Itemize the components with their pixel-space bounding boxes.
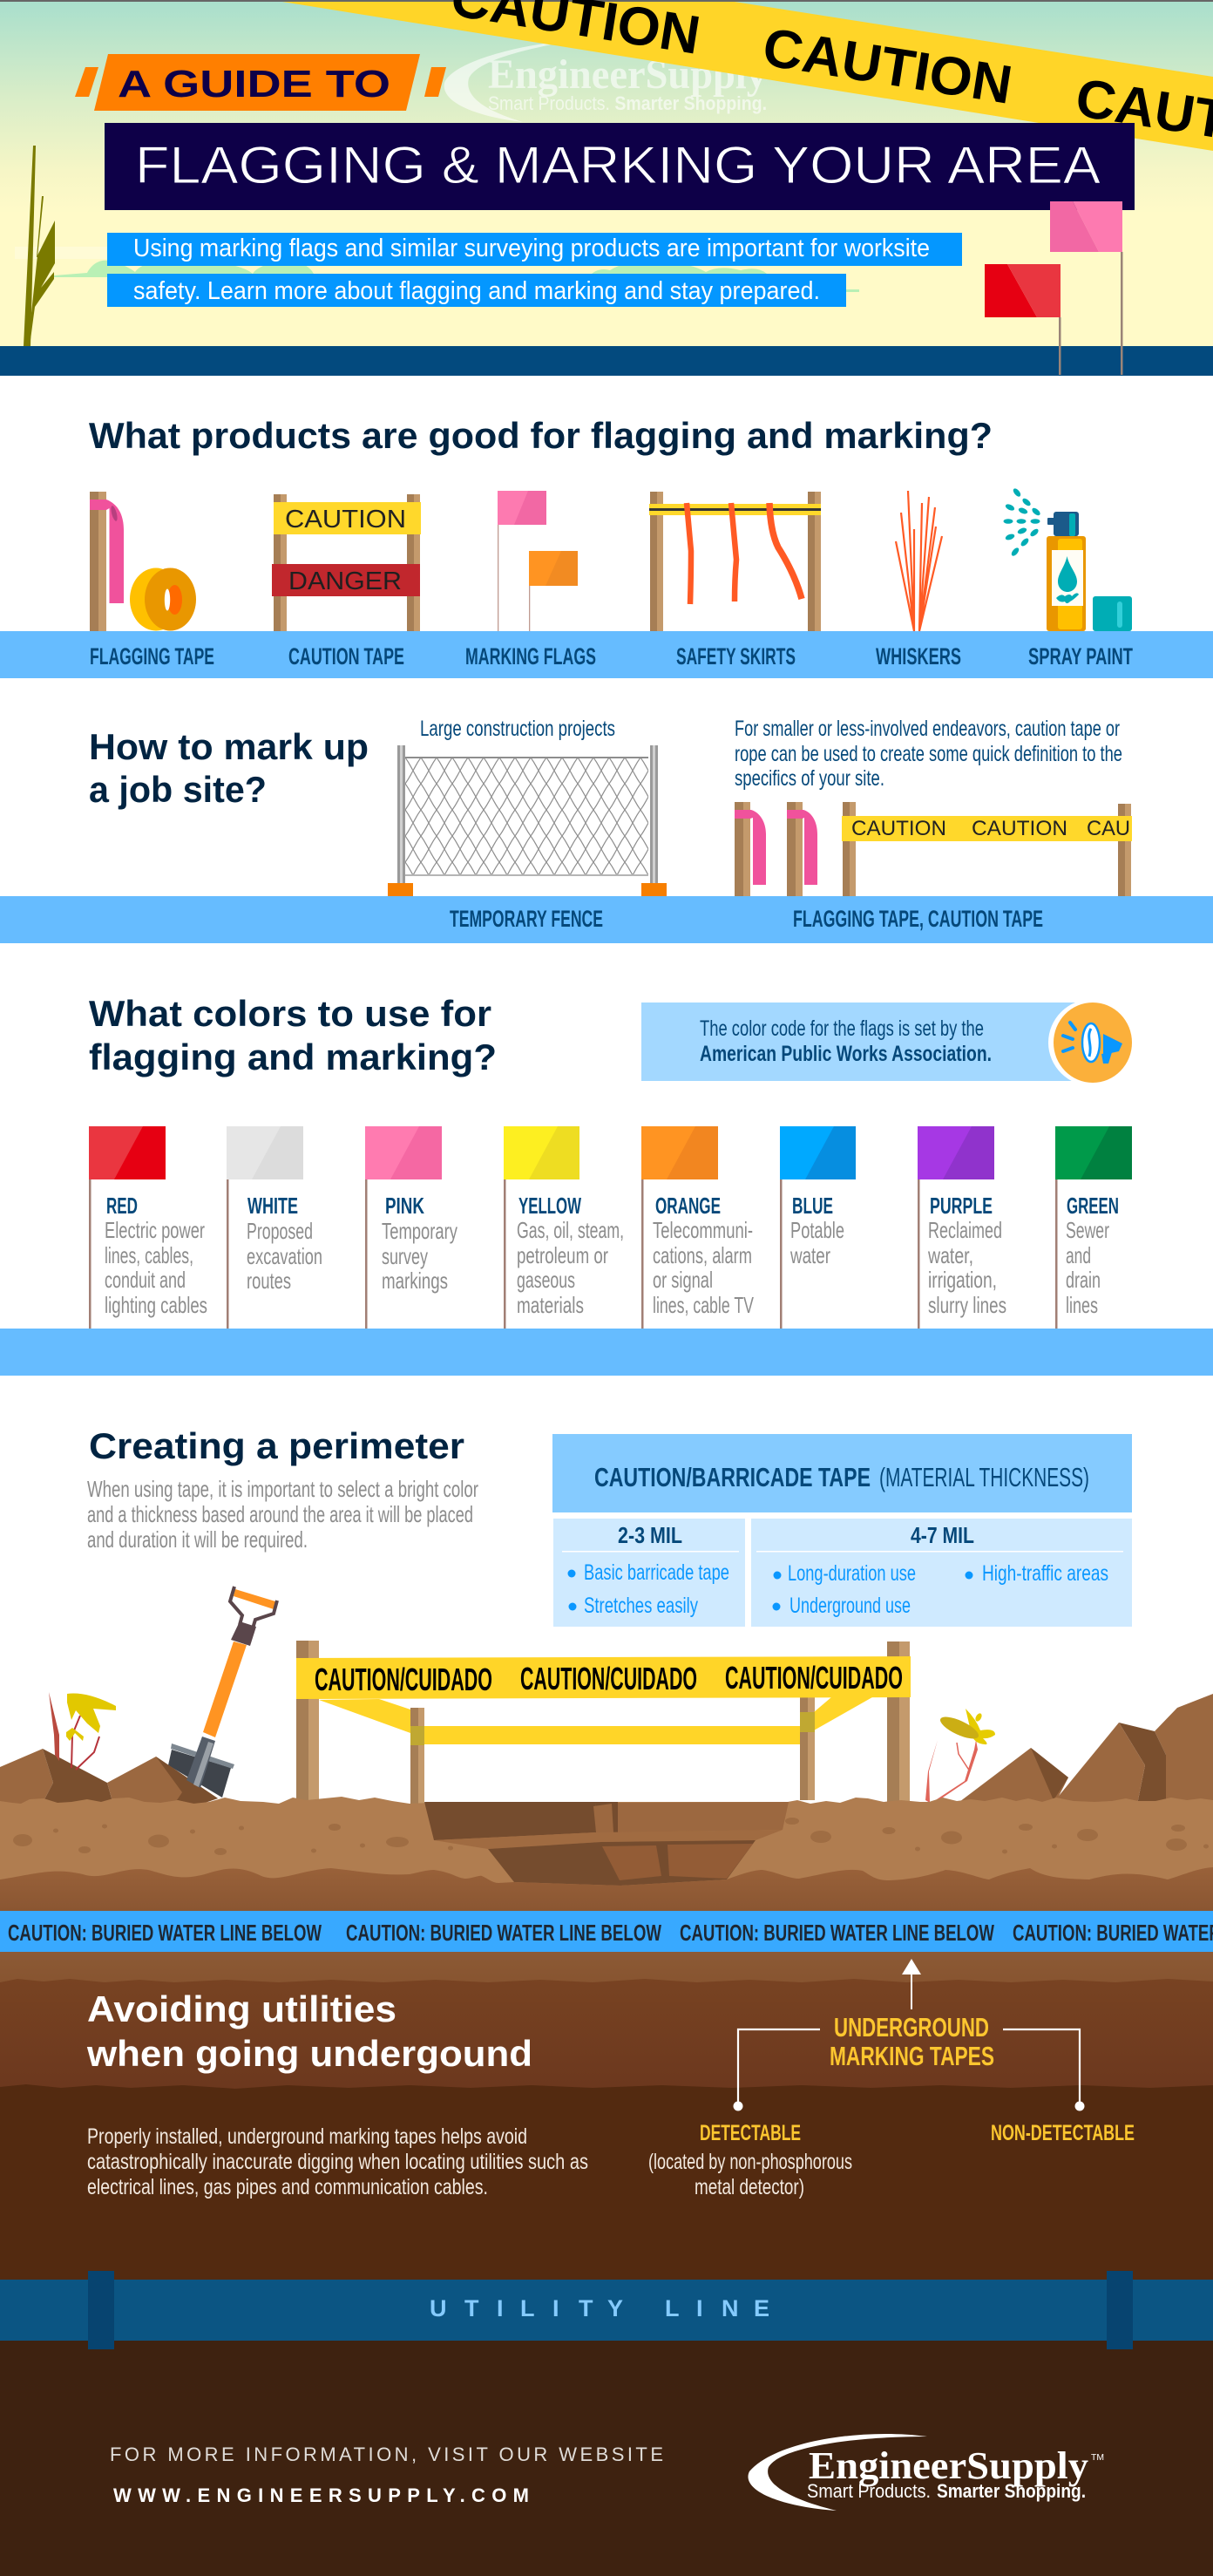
table: tape thickness: Underground use	[789, 1594, 911, 1618]
callout: APWA	[641, 999, 1137, 1086]
footer logo: Smarter Shopping.	[937, 2480, 1086, 2502]
flag: yellow: gaseous	[517, 1267, 575, 1293]
diagram: underground marking tapes: NON-DETECTABLE	[991, 2121, 1135, 2145]
marking tape: CAUTION: BURIED WATER LINE BELOW	[346, 1920, 661, 1946]
scene: mounds left	[0, 1743, 234, 1805]
flag: green: lines	[1066, 1292, 1098, 1318]
flag: orange: Telecommuni-	[653, 1217, 753, 1243]
band	[0, 1329, 1213, 1376]
intro text	[107, 233, 962, 307]
text: perimeter: and a thickness based around the area it will be placed	[87, 1501, 473, 1527]
heading: colors	[89, 993, 497, 1077]
label: FLAGGING TAPE, CAUTION TAPE	[793, 906, 1043, 932]
marking tape: CAUTION: BURIED WATER LINE BELOW	[680, 1920, 994, 1946]
flag: pink: Temporary	[382, 1218, 457, 1244]
icon: plant right	[925, 1709, 995, 1803]
flag: red: RED	[106, 1193, 138, 1219]
icon: shovel	[186, 1587, 277, 1788]
icon: megaphone	[1063, 1023, 1122, 1064]
heading: how to mark up	[89, 726, 369, 810]
a guide to badge	[75, 54, 446, 111]
text: large projects: Large construction projects	[420, 717, 615, 741]
barricade: CAUTION/CUIDADO	[520, 1661, 697, 1696]
text: avoiding utilities	[87, 2124, 588, 2199]
heading: colors: What colors to use for	[89, 993, 491, 1034]
faded logo: EngineerSupply	[488, 51, 767, 98]
caution tape banner	[282, 0, 1213, 167]
grass	[24, 146, 55, 346]
flag: white: Proposed	[247, 1218, 313, 1244]
title	[105, 123, 1135, 210]
text: perimeter: and duration it will be required.	[87, 1526, 308, 1553]
flag: orange: or signal	[653, 1267, 713, 1293]
icon: pink flag	[1050, 201, 1122, 375]
flag: yellow	[504, 1126, 624, 1329]
mounds right	[956, 1694, 1213, 1805]
title: FLAGGING & MARKING YOUR AREA	[135, 136, 1101, 194]
flag: green: drain	[1066, 1267, 1101, 1293]
footer text	[110, 2443, 663, 2506]
intro text: safety. Learn more about flagging and marking and stay prepared.	[133, 277, 820, 305]
icon: flagging and caution tape posts	[735, 802, 1132, 896]
table: tape thickness: High-traffic areas	[982, 1561, 1108, 1586]
flag: purple	[918, 1126, 1006, 1329]
flag: green	[1055, 1126, 1132, 1329]
icon: flagging and caution tape posts: CAUTION	[972, 817, 1067, 840]
table: tape thickness: 4-7 MIL	[911, 1522, 974, 1548]
flag: purple: PURPLE	[930, 1193, 993, 1219]
flag: purple: irrigation,	[928, 1267, 997, 1293]
flag: white	[227, 1126, 322, 1329]
text: avoiding utilities: catastrophically inaccurate digging when locating utilities such as	[87, 2150, 588, 2174]
icon: marking flags	[498, 491, 578, 631]
table: tape thickness: Stretches easily	[584, 1594, 698, 1618]
table: tape thickness: CAUTION/BARRICADE TAPE	[594, 1462, 871, 1492]
flag: purple: slurry lines	[928, 1292, 1006, 1318]
callout: APWA: The color code for the flags is set by the	[700, 1016, 984, 1041]
heading: colors: flagging and marking?	[89, 1037, 497, 1077]
flag: yellow: Gas, oil, steam,	[517, 1217, 624, 1243]
utility line pipe: UTILITY LINE	[430, 2295, 769, 2321]
table: tape thickness	[552, 1434, 1132, 1627]
icon: flagging and caution tape posts: CAU	[1087, 817, 1130, 840]
flag: orange: ORANGE	[655, 1193, 721, 1219]
text: perimeter: When using tape, it is important to select a bright color	[87, 1476, 478, 1502]
icon: flagging and caution tape posts: CAUTION	[851, 817, 946, 840]
icon: red flag	[985, 264, 1061, 375]
flag: blue: BLUE	[792, 1193, 833, 1219]
heading: perimeter: Creating a perimeter	[89, 1425, 464, 1466]
icon: caution tape with danger tape	[272, 494, 421, 631]
label: SPRAY PAINT	[1028, 643, 1133, 669]
callout: APWA: American Public Works Association.	[700, 1042, 992, 1066]
flag: pink: markings	[382, 1268, 448, 1294]
heading: avoiding utilities: when going undergound	[86, 2033, 532, 2074]
utility line pipe	[0, 2271, 1213, 2349]
flag: orange: lines, cable TV	[653, 1292, 754, 1318]
flag: pink: PINK	[385, 1193, 424, 1219]
flag: green: GREEN	[1067, 1193, 1119, 1219]
diagram: underground marking tapes: metal detector)	[695, 2175, 804, 2199]
ground	[0, 1797, 1213, 1911]
diagram: underground marking tapes	[648, 1959, 1135, 2199]
footer logo: EngineerSupply	[809, 2444, 1088, 2487]
faint bushes background	[54, 260, 859, 292]
flag: pink	[365, 1126, 457, 1329]
caution tape banner: CAUTION	[759, 17, 1016, 116]
flag: blue	[780, 1126, 856, 1329]
flag: pink: survey	[382, 1243, 428, 1269]
marking tape: CAUTION: BURIED WATER LINE BELOW	[8, 1920, 322, 1946]
flag: red: lighting cables	[105, 1292, 207, 1318]
footer logo	[748, 2434, 1104, 2511]
diagram: underground marking tapes: (located by non-phosphorous	[648, 2150, 852, 2174]
icon: caution tape with danger tape: CAUTION	[285, 506, 406, 534]
diagram: underground marking tapes: UNDERGROUND	[834, 2012, 989, 2042]
flag: purple: Reclaimed	[928, 1217, 1002, 1243]
navy band	[0, 346, 1213, 376]
footer logo: TM	[1091, 2453, 1104, 2463]
faint haze	[15, 247, 107, 259]
heading: products: What products are good for flagging and marking?	[89, 415, 993, 456]
marking tape	[0, 1911, 1213, 1952]
text: smaller endeavors	[735, 717, 1122, 791]
flag: yellow: YELLOW	[518, 1193, 581, 1219]
footer logo: Smart Products.	[807, 2480, 931, 2502]
flag: purple: water,	[927, 1242, 973, 1268]
label: FLAGGING TAPE	[90, 643, 214, 669]
products band	[0, 631, 1213, 678]
flag: orange	[641, 1126, 754, 1329]
heading: how to mark up: How to mark up	[89, 726, 369, 767]
heading: avoiding utilities	[86, 1988, 532, 2074]
diagram: underground marking tapes: DETECTABLE	[700, 2121, 801, 2145]
footer text: FOR MORE INFORMATION, VISIT OUR WEBSITE	[110, 2443, 663, 2465]
faded logo: Smart Products. Smarter Shopping.	[488, 92, 767, 114]
text: smaller endeavors: specifics of your site.	[735, 766, 884, 791]
icon: flagging tape	[90, 492, 196, 631]
text: perimeter	[87, 1476, 478, 1553]
flag: yellow: petroleum or	[517, 1242, 608, 1268]
flag: red: Electric power	[105, 1217, 205, 1243]
heading: how to mark up: a job site?	[89, 769, 267, 810]
icon: safety skirts	[649, 492, 821, 631]
label: MARKING FLAGS	[465, 643, 596, 669]
icon: temporary fence	[388, 745, 667, 896]
flag: red: lines, cables,	[105, 1242, 193, 1268]
text: avoiding utilities: electrical lines, gas pipes and communication cables.	[87, 2175, 488, 2199]
icon: plant left	[49, 1692, 116, 1770]
table: tape thickness: (MATERIAL THICKNESS)	[879, 1462, 1089, 1492]
flag: blue: Potable	[790, 1217, 844, 1243]
a guide to badge: A GUIDE TO	[118, 63, 390, 105]
icon: spray paint	[1004, 487, 1132, 631]
faded logo	[444, 40, 767, 122]
band	[0, 896, 1213, 943]
flag: green: Sewer	[1066, 1217, 1109, 1243]
barricade: CAUTION/CUIDADO	[725, 1660, 903, 1696]
heading: avoiding utilities: Avoiding utilities	[87, 1988, 396, 2029]
text: avoiding utilities: Properly installed, underground marking tapes helps avoid	[87, 2124, 527, 2149]
barricade: CAUTION/CUIDADO	[315, 1662, 492, 1697]
deep soil	[0, 1952, 1213, 2576]
barricade	[296, 1641, 911, 1804]
intro text: Using marking flags and similar surveying products are important for worksite	[133, 234, 930, 262]
table: tape thickness: Long-duration use	[788, 1561, 916, 1586]
flag: white: routes	[247, 1268, 291, 1294]
pit	[424, 1802, 789, 1886]
panel: header	[0, 0, 1213, 376]
flag: red	[89, 1126, 207, 1329]
table: tape thickness: 2-3 MIL	[618, 1522, 682, 1548]
label: SAFETY SKIRTS	[676, 643, 796, 669]
flag: orange: cations, alarm	[653, 1242, 752, 1268]
label: CAUTION TAPE	[288, 643, 404, 669]
flag: blue: water	[789, 1242, 830, 1268]
flag: white: excavation	[247, 1243, 322, 1269]
label: TEMPORARY FENCE	[450, 906, 603, 932]
icon: caution tape with danger tape: DANGER	[288, 568, 402, 595]
label: WHISKERS	[876, 643, 961, 669]
footer text: WWW.ENGINEERSUPPLY.COM	[113, 2484, 529, 2506]
table: tape thickness: Basic barricade tape	[584, 1560, 729, 1585]
flag: green: and	[1066, 1242, 1091, 1268]
arrow: up	[902, 1959, 921, 2009]
flag: white: WHITE	[247, 1193, 298, 1219]
icon: whiskers	[896, 491, 942, 631]
diagram: underground marking tapes: MARKING TAPES	[830, 2041, 994, 2071]
flag: red: conduit and	[105, 1267, 186, 1293]
flag: yellow: materials	[517, 1292, 584, 1318]
